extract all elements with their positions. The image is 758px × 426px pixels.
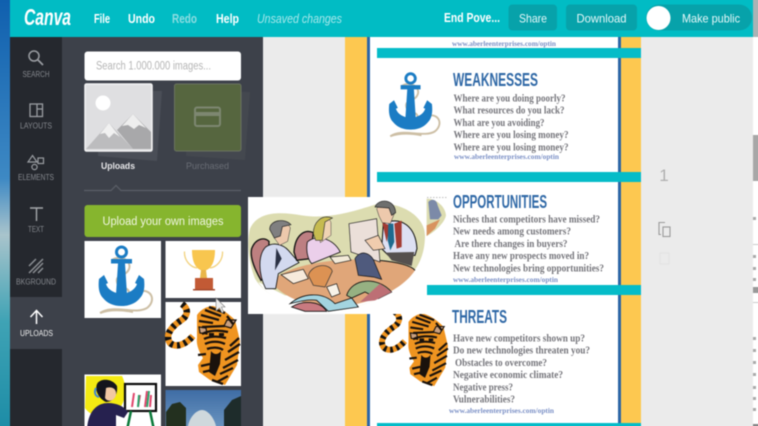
desktop background strip bbox=[0, 0, 10, 426]
tool: elements: ELEMENTS bbox=[18, 173, 54, 182]
tool: uploads active bbox=[20, 310, 53, 338]
weaknesses questions: What are you avoiding? bbox=[454, 118, 544, 129]
page number: 1 bbox=[659, 166, 669, 185]
middle chair bbox=[294, 232, 313, 260]
opportunities questions: Are there changes in buyers? bbox=[454, 239, 568, 250]
tool: elements bbox=[18, 156, 54, 182]
tool: uploads active: UPLOADS bbox=[20, 329, 53, 338]
threats questions: Negative economic climate? bbox=[453, 370, 563, 381]
opportunities questions: Niches that competitors have missed? bbox=[453, 214, 600, 226]
section: opportunities bbox=[453, 192, 604, 284]
top toolbar bbox=[10, 0, 753, 37]
section: threats bbox=[382, 307, 590, 415]
canvas workspace background bbox=[263, 37, 753, 426]
white cut under table bbox=[258, 282, 395, 311]
heading: weaknesses: WEAKNESSES bbox=[453, 70, 538, 90]
button: download: Download bbox=[576, 12, 626, 26]
threats questions: Have new competitors shown up? bbox=[453, 334, 585, 344]
table bbox=[271, 260, 415, 306]
icon: tiger bbox=[382, 312, 448, 386]
search box bbox=[84, 52, 241, 80]
toggle: make public: Make public bbox=[682, 12, 740, 26]
papers on table bbox=[281, 269, 308, 284]
seated person with dark hair bbox=[355, 253, 382, 279]
button: share: Share bbox=[519, 12, 547, 26]
menu items: Unsaved changes bbox=[257, 12, 342, 26]
top section link: www.aberleenterprises.com/optin bbox=[452, 39, 557, 48]
beige background blob bbox=[248, 204, 425, 311]
page tools: number, copy, delete bbox=[659, 166, 670, 264]
search box: Search 1.000.000 images... bbox=[96, 60, 211, 72]
threats link: www.aberleenterprises.com/optin bbox=[449, 406, 555, 415]
toggle: make public bbox=[646, 4, 752, 30]
tab: purchased: Purchased bbox=[186, 161, 229, 172]
tool: text: TEXT bbox=[28, 225, 44, 234]
tool: background bbox=[16, 259, 56, 286]
threats questions bbox=[453, 334, 590, 406]
selected clipart: business meeting bbox=[248, 197, 447, 314]
tab: uploads: Uploads bbox=[101, 161, 135, 172]
menu items: File bbox=[94, 12, 110, 26]
side panel bbox=[62, 37, 263, 426]
button: share bbox=[508, 4, 557, 30]
icon: delete page bbox=[660, 253, 669, 264]
mouse cursor bbox=[216, 298, 225, 313]
woman bbox=[307, 238, 340, 264]
tool: text bbox=[28, 208, 44, 234]
thumbnail: tiger bbox=[166, 302, 241, 386]
button: upload your own images bbox=[84, 205, 241, 237]
menu items: Help bbox=[216, 12, 239, 26]
threats questions: Vulnerabilities? bbox=[453, 394, 515, 406]
tool: layouts bbox=[20, 104, 52, 130]
threats questions: Obstacles to overcome? bbox=[455, 358, 547, 369]
opportunities questions bbox=[453, 214, 604, 274]
opportunities questions: New needs among customers? bbox=[453, 226, 571, 238]
threats questions: Do new technologies threaten you? bbox=[453, 346, 590, 356]
thumbnail: presenter bbox=[84, 374, 161, 426]
left man bbox=[260, 244, 299, 289]
opportunities link: www.aberleenterprises.com/optin bbox=[453, 275, 559, 284]
weaknesses questions: Where are you doing poorly? bbox=[454, 94, 566, 104]
tool: background: BKGROUND bbox=[16, 278, 56, 286]
threats questions: Negative press? bbox=[453, 382, 513, 394]
chart board bbox=[349, 219, 380, 262]
weaknesses questions bbox=[454, 94, 568, 154]
tab: uploads bbox=[85, 84, 162, 172]
document page: SWOT infographic bbox=[345, 37, 641, 426]
weaknesses questions: What resources do you lack? bbox=[454, 106, 564, 116]
presenter hand bbox=[365, 235, 385, 250]
clipped right-hand fragment of clipart bbox=[427, 199, 446, 236]
opportunities questions: New technologies bring opportunities? bbox=[453, 264, 604, 274]
thumbnail: trophy bbox=[166, 241, 241, 298]
heading: threats: THREATS bbox=[452, 307, 507, 327]
left chair bbox=[251, 239, 269, 280]
thumbnail: anchor bbox=[84, 241, 161, 318]
menu items: Undo bbox=[128, 12, 155, 26]
menu items bbox=[94, 12, 342, 26]
weaknesses link: www.aberleenterprises.com/optin bbox=[454, 152, 560, 161]
neighbouring window strip bbox=[753, 0, 758, 426]
tool: search bbox=[22, 51, 50, 79]
tool: search: SEARCH bbox=[22, 70, 50, 79]
opportunities questions: Have any new prospects moved in? bbox=[453, 251, 589, 262]
button: upload your own images: Upload your own images bbox=[102, 216, 224, 228]
section: weaknesses bbox=[389, 70, 568, 161]
thumbnail: photo bbox=[166, 390, 241, 426]
weaknesses questions: Where are you losing money? bbox=[454, 142, 568, 154]
button: download bbox=[566, 4, 637, 30]
standing man bbox=[382, 221, 417, 255]
menu items: Redo bbox=[172, 12, 197, 26]
tool: layouts: LAYOUTS bbox=[20, 122, 52, 130]
logo: Canva bbox=[24, 4, 71, 30]
foreground person bbox=[308, 266, 332, 287]
icon: anchor bbox=[389, 74, 439, 136]
heading: opportunities: OPPORTUNITIES bbox=[453, 192, 547, 212]
tab divider bbox=[84, 186, 241, 190]
icon: copy page bbox=[659, 222, 670, 236]
tool sidebar bbox=[10, 37, 62, 426]
tab: purchased bbox=[174, 84, 250, 172]
document title: End Pove... bbox=[444, 11, 500, 25]
weaknesses questions: Where are you losing money? bbox=[454, 130, 568, 141]
